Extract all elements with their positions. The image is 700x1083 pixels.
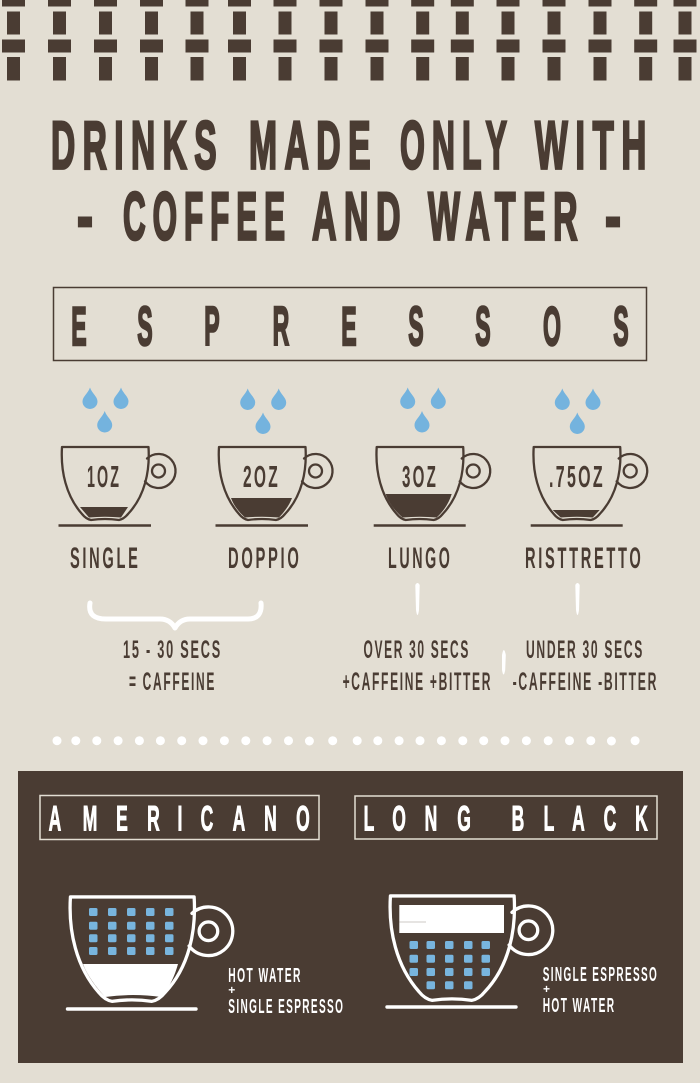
icon: cup 2 oz	[216, 447, 333, 526]
amount label: .75OZ	[549, 459, 605, 494]
heading box: espressos: ESPRESSOS	[71, 295, 629, 357]
heading box: americano: AMERICANO	[49, 799, 310, 838]
title	[51, 108, 654, 254]
title: AND	[312, 178, 408, 254]
caption: single and doppio: 15 - 30 SECS	[123, 636, 222, 664]
single espresso layer	[399, 905, 504, 933]
amount label: 2OZ	[243, 459, 280, 494]
panel: americano and long black: SINGLE ESPRESSO	[228, 995, 344, 1018]
icon: long black cup	[387, 896, 553, 1007]
hot water blocks	[89, 908, 174, 955]
icon: water drops	[400, 388, 446, 432]
legend: long black: +	[543, 982, 550, 996]
title: ONLY	[400, 108, 514, 184]
title: -	[77, 178, 93, 254]
legend: long black	[543, 963, 658, 1017]
brace: single and doppio	[90, 603, 261, 628]
legend: americano	[228, 964, 344, 1018]
legend: americano: HOT WATER	[228, 964, 302, 987]
espresso column: lungo	[374, 388, 490, 575]
espresso column: doppio	[216, 388, 333, 575]
tick: ristretto	[575, 583, 580, 615]
espresso column: ristretto	[525, 388, 647, 575]
icon: water drops	[82, 388, 128, 432]
title: DRINKS	[51, 108, 224, 184]
legend: americano: +	[228, 983, 235, 997]
legend: long black: HOT WATER	[543, 994, 616, 1017]
text: +CAFFEINE +BITTER	[343, 668, 492, 696]
espresso column: single: SINGLE	[70, 542, 140, 575]
caption: single and doppio	[123, 636, 222, 696]
title: -	[605, 178, 621, 254]
top pattern band	[2, 0, 696, 80]
caption: lungo: OVER 30 SECS	[364, 636, 470, 664]
espresso column: lungo: LUNGO	[388, 542, 452, 575]
tick: lungo	[415, 583, 420, 615]
icon: cup .75 oz	[531, 447, 647, 526]
icon: cup 1 oz	[58, 447, 176, 526]
title: MADE	[249, 108, 378, 184]
caption: lungo	[343, 636, 492, 696]
caption: single and doppio: = CAFFEINE	[129, 668, 216, 696]
heading box: long black: LONG BLACK	[364, 799, 648, 838]
dotted divider	[52, 736, 640, 746]
tick: separator	[502, 650, 506, 674]
panel: americano and long black	[18, 771, 683, 1063]
icon: americano cup	[68, 897, 233, 1009]
espresso column: lungo: 3OZ	[402, 459, 438, 494]
icon: water drops	[240, 388, 286, 434]
hot water blocks	[410, 941, 490, 989]
espresso column: doppio: DOPPIO	[228, 542, 302, 575]
icon: cup 3 oz	[374, 447, 490, 526]
title: COFFEE	[123, 178, 292, 254]
icon: water drops	[555, 388, 600, 434]
espresso column: single	[58, 388, 176, 575]
espresso column: single: 1OZ	[87, 459, 121, 494]
single espresso fill	[83, 964, 178, 997]
caption: ristretto	[513, 636, 658, 696]
